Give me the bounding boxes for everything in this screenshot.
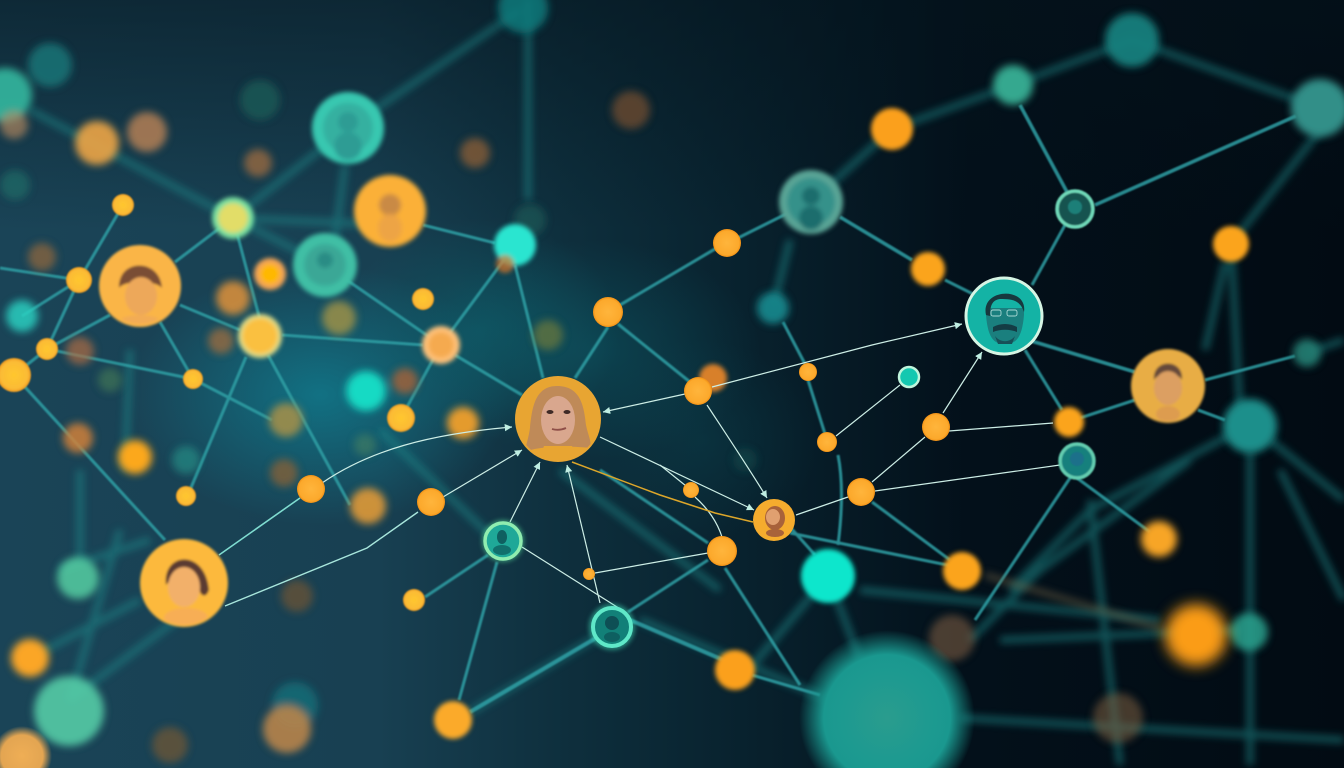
- left small yellow nodes: [0, 194, 434, 611]
- large blurred orange node: [1165, 604, 1227, 666]
- highlighted orange link: [572, 462, 753, 522]
- very blurred foreground node: [799, 630, 975, 768]
- sharp teal edges: [0, 105, 1296, 712]
- portrait: right man: [1131, 349, 1205, 423]
- portrait: central woman: [515, 376, 601, 462]
- bottom-left orange node: [0, 726, 52, 768]
- portrait: small centre woman: [753, 499, 795, 541]
- portrait: lower left woman: [140, 539, 228, 628]
- sharp small orange nodes: [297, 229, 950, 580]
- portrait: left woman: [99, 245, 181, 335]
- portrait: man with glasses: [966, 278, 1042, 354]
- mid-focus nodes: [212, 92, 1249, 739]
- blurred small portraits: [1057, 191, 1094, 478]
- thin white connection lines: [219, 324, 1060, 612]
- brown faint link to large orange node: [985, 575, 1160, 628]
- small teal ring nodes: [482, 367, 919, 650]
